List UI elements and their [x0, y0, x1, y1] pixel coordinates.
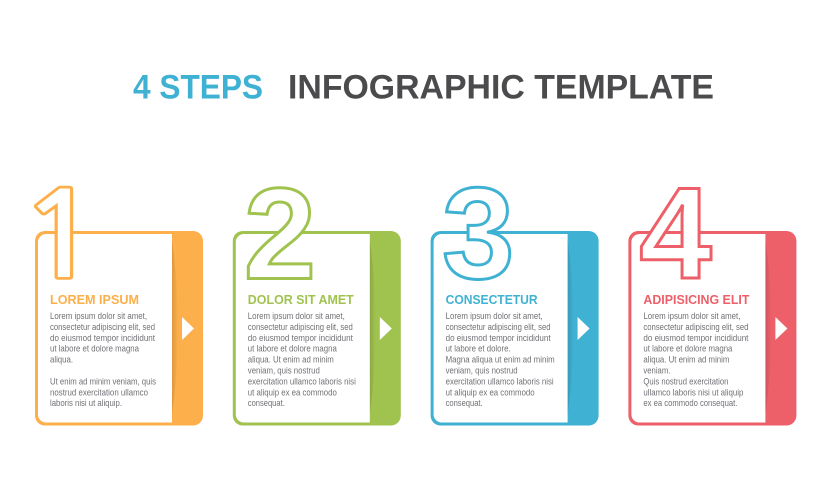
- heading: LOREM IPSUM: [50, 292, 139, 307]
- body text: aliqua.: [50, 355, 73, 365]
- body text: consectetur adipiscing elit, sed: [643, 322, 748, 332]
- body text: Ut enim ad minim veniam, quis: [50, 376, 156, 386]
- body text: nostrud exercitation ullamco: [50, 387, 148, 397]
- body text: do eiusmod tempor incididunt: [50, 333, 155, 343]
- panel: step 1: [17, 178, 203, 426]
- card frame and side band: [431, 231, 599, 426]
- body text: veniam, quis nostrud: [446, 366, 518, 376]
- body text: ullamco laboris nisi ut aliquip: [643, 387, 743, 397]
- arrow: [380, 317, 392, 340]
- body text: veniam, quis nostrud: [248, 366, 320, 376]
- body text: ut aliquip ex ea commodo: [248, 387, 337, 397]
- body text: Lorem ipsum dolor sit amet,: [248, 311, 345, 321]
- panel: step 3: [431, 160, 599, 426]
- title main: infographic template: INFOGRAPHIC TEMPLATE: [288, 68, 714, 106]
- panel: step 2: [233, 160, 401, 426]
- body text: Lorem ipsum dolor sit amet,: [446, 311, 543, 321]
- step number 3: 3: [442, 160, 514, 306]
- body text: consectetur adipiscing elit, sed: [446, 322, 551, 332]
- heading: ADIPISICING ELIT: [643, 292, 749, 307]
- panel: step 4: [628, 160, 796, 426]
- body text: do eiusmod tempor incididunt: [248, 333, 353, 343]
- body text: Lorem ipsum dolor sit amet,: [50, 311, 147, 321]
- body text: [446, 311, 555, 408]
- body text: [248, 311, 356, 408]
- body text: consectetur adipiscing elit, sed: [248, 322, 353, 332]
- card frame and side band: [628, 231, 796, 426]
- arrow: [775, 317, 787, 340]
- body text: veniam.: [643, 366, 670, 376]
- title accent: 4 steps: 4 STEPS: [133, 68, 263, 106]
- body text: do eiusmod tempor incididunt: [643, 333, 749, 343]
- heading: DOLOR SIT AMET: [248, 292, 354, 307]
- body text: ut labore et dolore.: [446, 344, 511, 354]
- body text: do eiusmod tempor incididunt: [446, 333, 551, 343]
- body text: ut aliquip ex ea commodo: [446, 387, 535, 397]
- body text: aliqua. Ut enim ad minim: [248, 355, 334, 365]
- heading: CONSECTETUR: [446, 292, 538, 307]
- body text: ex ea commodo consequat.: [643, 398, 737, 408]
- body text: [643, 311, 749, 408]
- body text: ut labore et dolore magna: [248, 344, 337, 354]
- body text: consequat.: [446, 398, 483, 408]
- body text: aliqua. Ut enim ad minim: [643, 355, 729, 365]
- body text: [50, 311, 156, 408]
- body text: Magna aliqua ut enim ad minim: [446, 355, 555, 365]
- step number 2: 2: [244, 160, 316, 306]
- body text: laboris nisi ut aliquip.: [50, 398, 122, 408]
- step number 4: 4: [639, 160, 712, 306]
- body text: consequat.: [248, 398, 285, 408]
- body text: consectetur adipiscing elit, sed: [50, 322, 155, 332]
- card frame and side band: [35, 231, 203, 426]
- body text: exercitation ullamco laboris nisi: [248, 376, 356, 386]
- body text: Quis nostrud exercitation: [643, 376, 728, 386]
- body text: ut labore et dolore magna: [50, 344, 139, 354]
- card frame and side band: [233, 231, 401, 426]
- body text: ut labore et dolore magna: [643, 344, 732, 354]
- arrow: [182, 317, 194, 340]
- body text: exercitation ullamco laboris nisi: [446, 376, 554, 386]
- step number 1: 1: [17, 178, 104, 296]
- body text: Lorem ipsum dolor sit amet,: [643, 311, 740, 321]
- title: [133, 68, 714, 106]
- arrow: [578, 317, 590, 340]
